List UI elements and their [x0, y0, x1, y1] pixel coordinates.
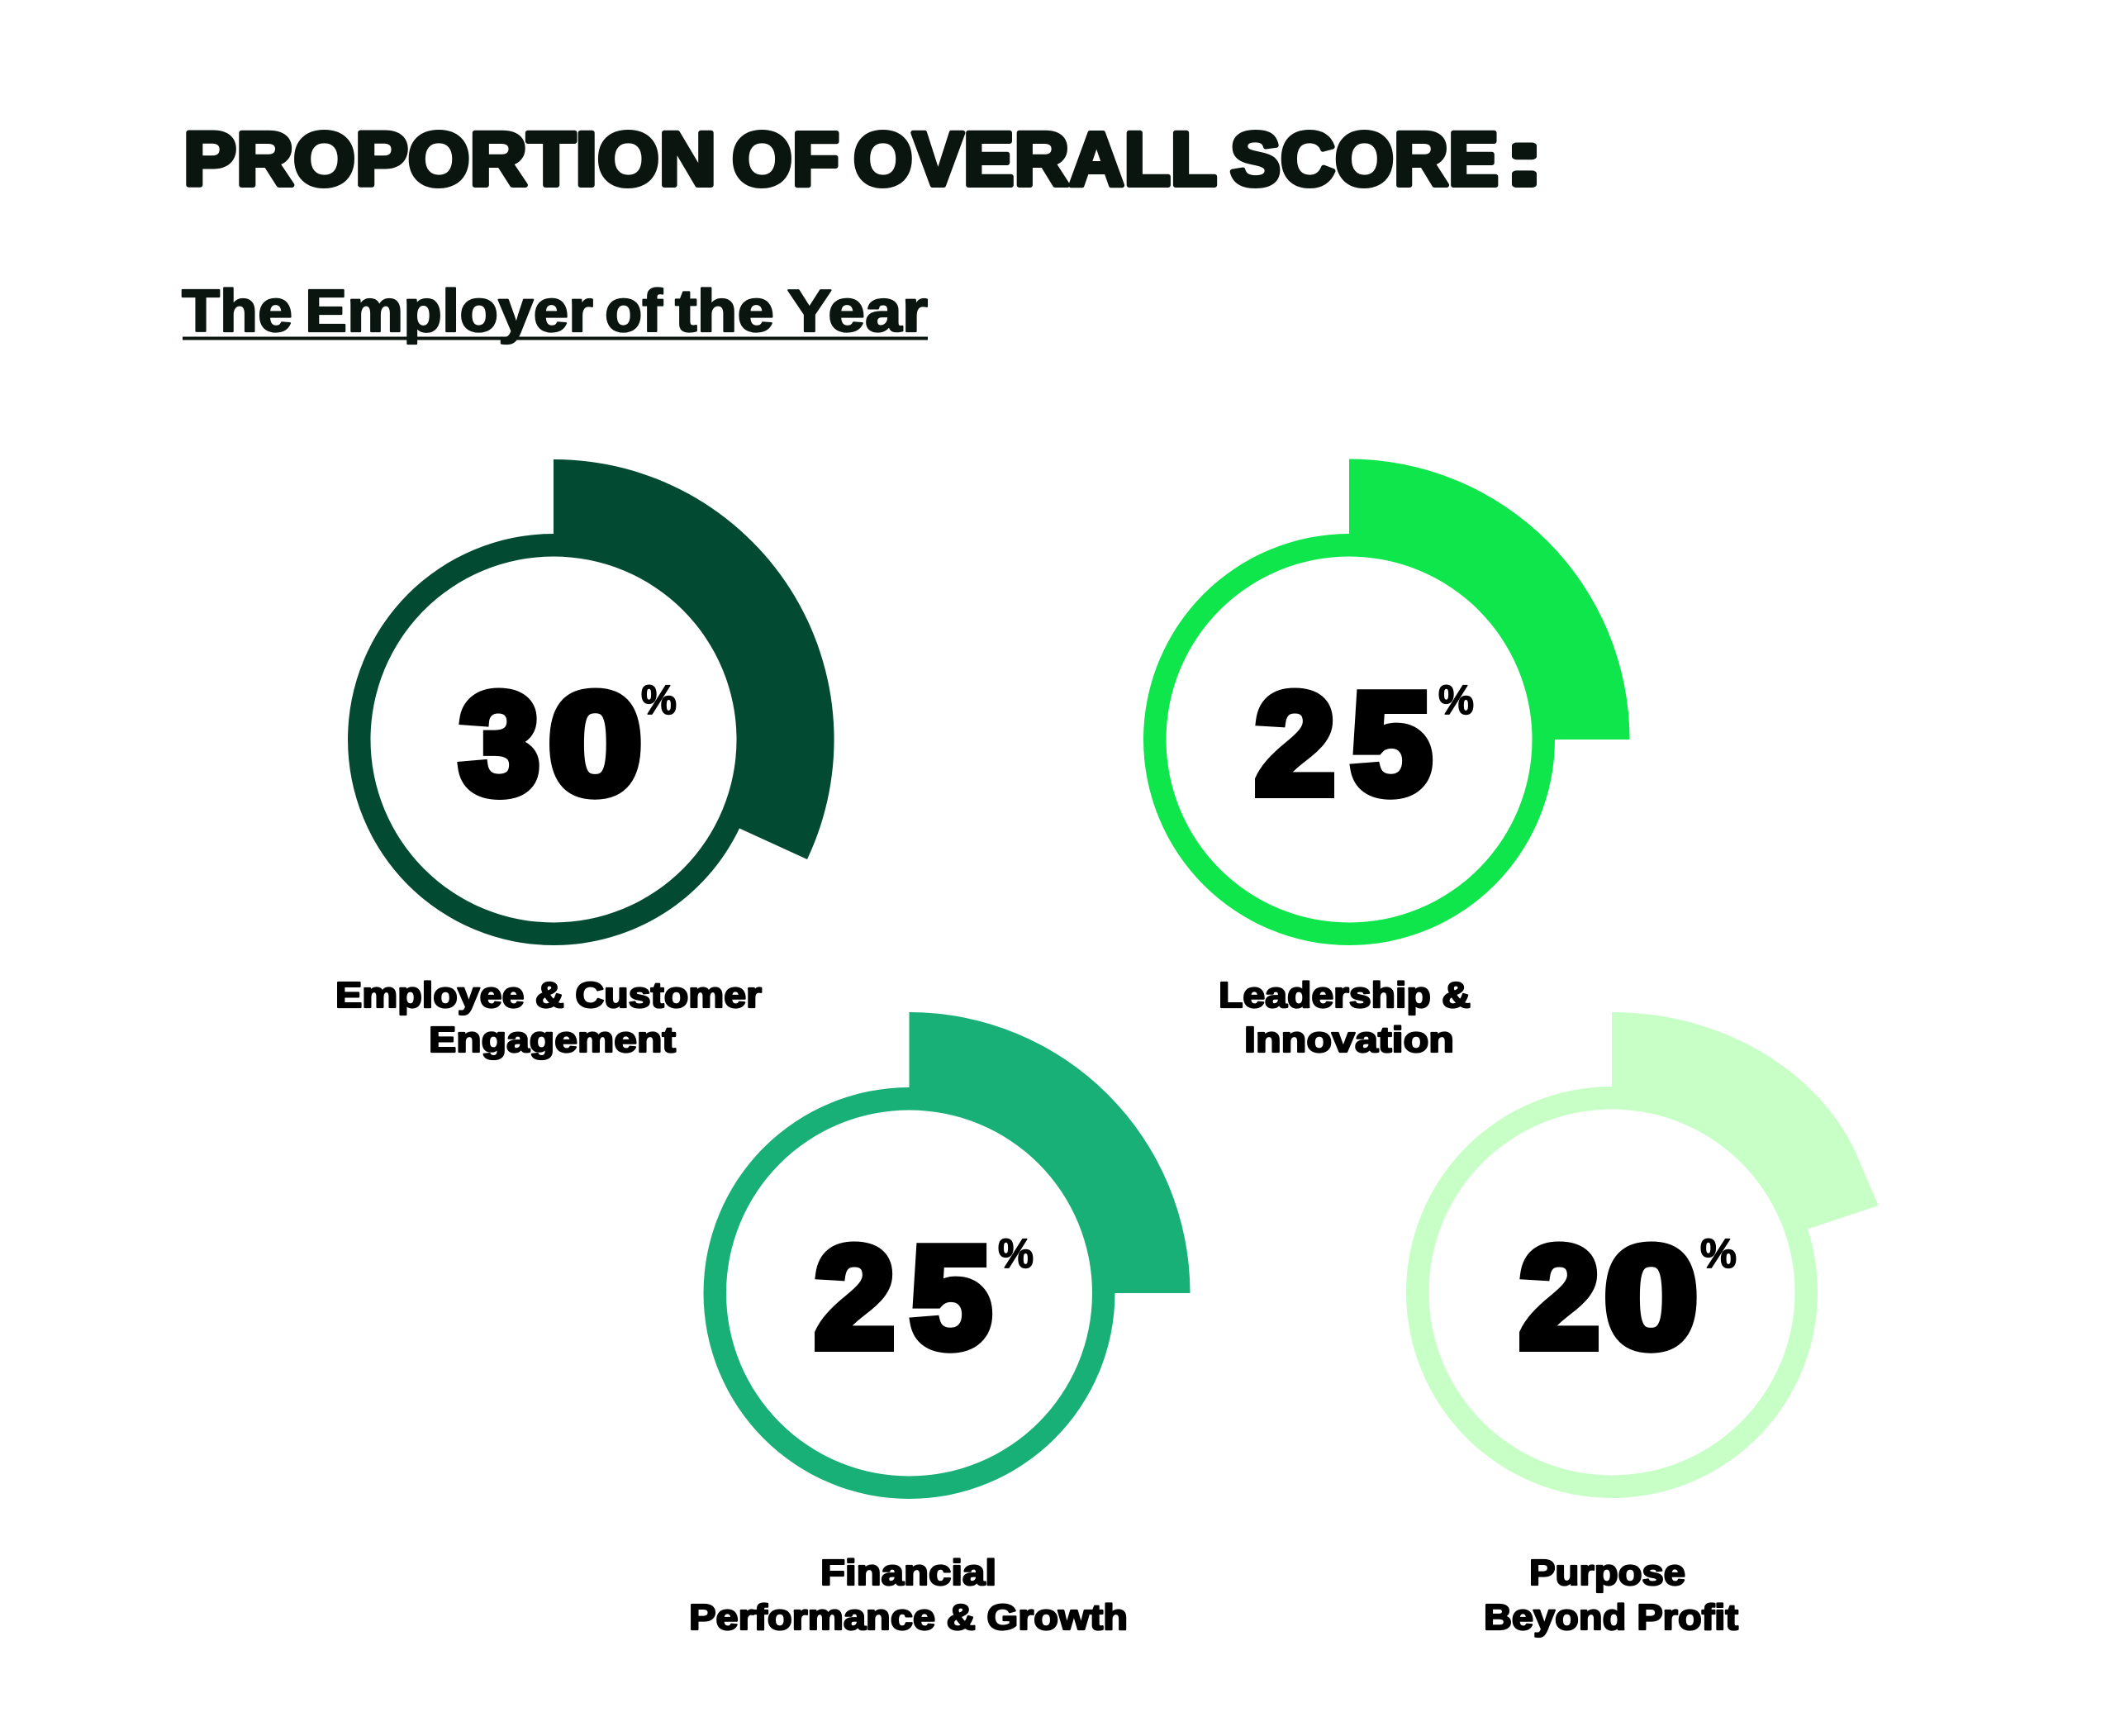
value: 20%: %	[1700, 1230, 1737, 1277]
panel: purpose beyond profit 20%	[1406, 1012, 1879, 1638]
label: employee and customer engagement: Employee & Customer	[335, 975, 762, 1015]
title: OVERALL	[853, 117, 1217, 202]
value: 20%: 0	[1604, 1216, 1698, 1377]
value: 30%: %	[641, 677, 677, 723]
value: 30%: 0	[549, 663, 642, 824]
subtitle: the	[675, 278, 774, 345]
subtitle: Employer	[305, 278, 593, 345]
label: leadership and innovation: Innovation	[1244, 1020, 1454, 1060]
value: 25%: 2	[1255, 663, 1335, 824]
value: 25%: 5	[1351, 663, 1432, 824]
value: 30%	[459, 663, 677, 824]
value: 25%	[815, 1216, 1034, 1377]
panel: employee and customer engagement 30%	[335, 459, 834, 1060]
label: purpose beyond profit: Beyond Profit	[1484, 1597, 1738, 1638]
subtitle: The	[182, 278, 292, 345]
label: financial performance and growth	[689, 1553, 1128, 1638]
label: leadership and innovation: Leadership &	[1219, 975, 1471, 1015]
ring and sector: 25% teal green	[704, 1012, 1190, 1499]
value: 25%: %	[1438, 677, 1474, 723]
value: 25%: 2	[815, 1216, 895, 1377]
label: financial performance and growth: Performance & Growth	[689, 1597, 1128, 1638]
value: 25%	[1255, 663, 1474, 824]
subtitle: Year	[787, 278, 928, 345]
title: SCORE	[1230, 117, 1499, 202]
value: 25%: %	[998, 1230, 1034, 1277]
label: purpose beyond profit	[1484, 1553, 1738, 1638]
panel: financial performance and growth 25%	[689, 1012, 1190, 1638]
title	[183, 117, 1542, 202]
value: 20%	[1519, 1216, 1737, 1377]
value: 30%: 3	[459, 663, 539, 824]
title: PROPORTION	[183, 117, 716, 202]
subtitle	[182, 278, 928, 345]
ring and sector: 25% bright green	[1143, 459, 1629, 945]
ring and sector: 30%	[348, 459, 834, 945]
label: financial performance and growth: Financial	[820, 1553, 996, 1593]
subtitle: of	[605, 278, 663, 345]
title: :	[1506, 117, 1542, 201]
label: purpose beyond profit: Purpose	[1529, 1553, 1685, 1593]
label: leadership and innovation	[1219, 975, 1471, 1060]
title: OF	[732, 117, 839, 202]
ring and sector: 20% pale green	[1406, 1012, 1879, 1498]
label: employee and customer engagement	[335, 975, 762, 1060]
value: 20%: 2	[1519, 1216, 1599, 1377]
label: employee and customer engagement: Engagement	[429, 1020, 676, 1060]
panel: leadership and innovation 25%	[1143, 459, 1629, 1060]
value: 25%: 5	[910, 1216, 991, 1377]
